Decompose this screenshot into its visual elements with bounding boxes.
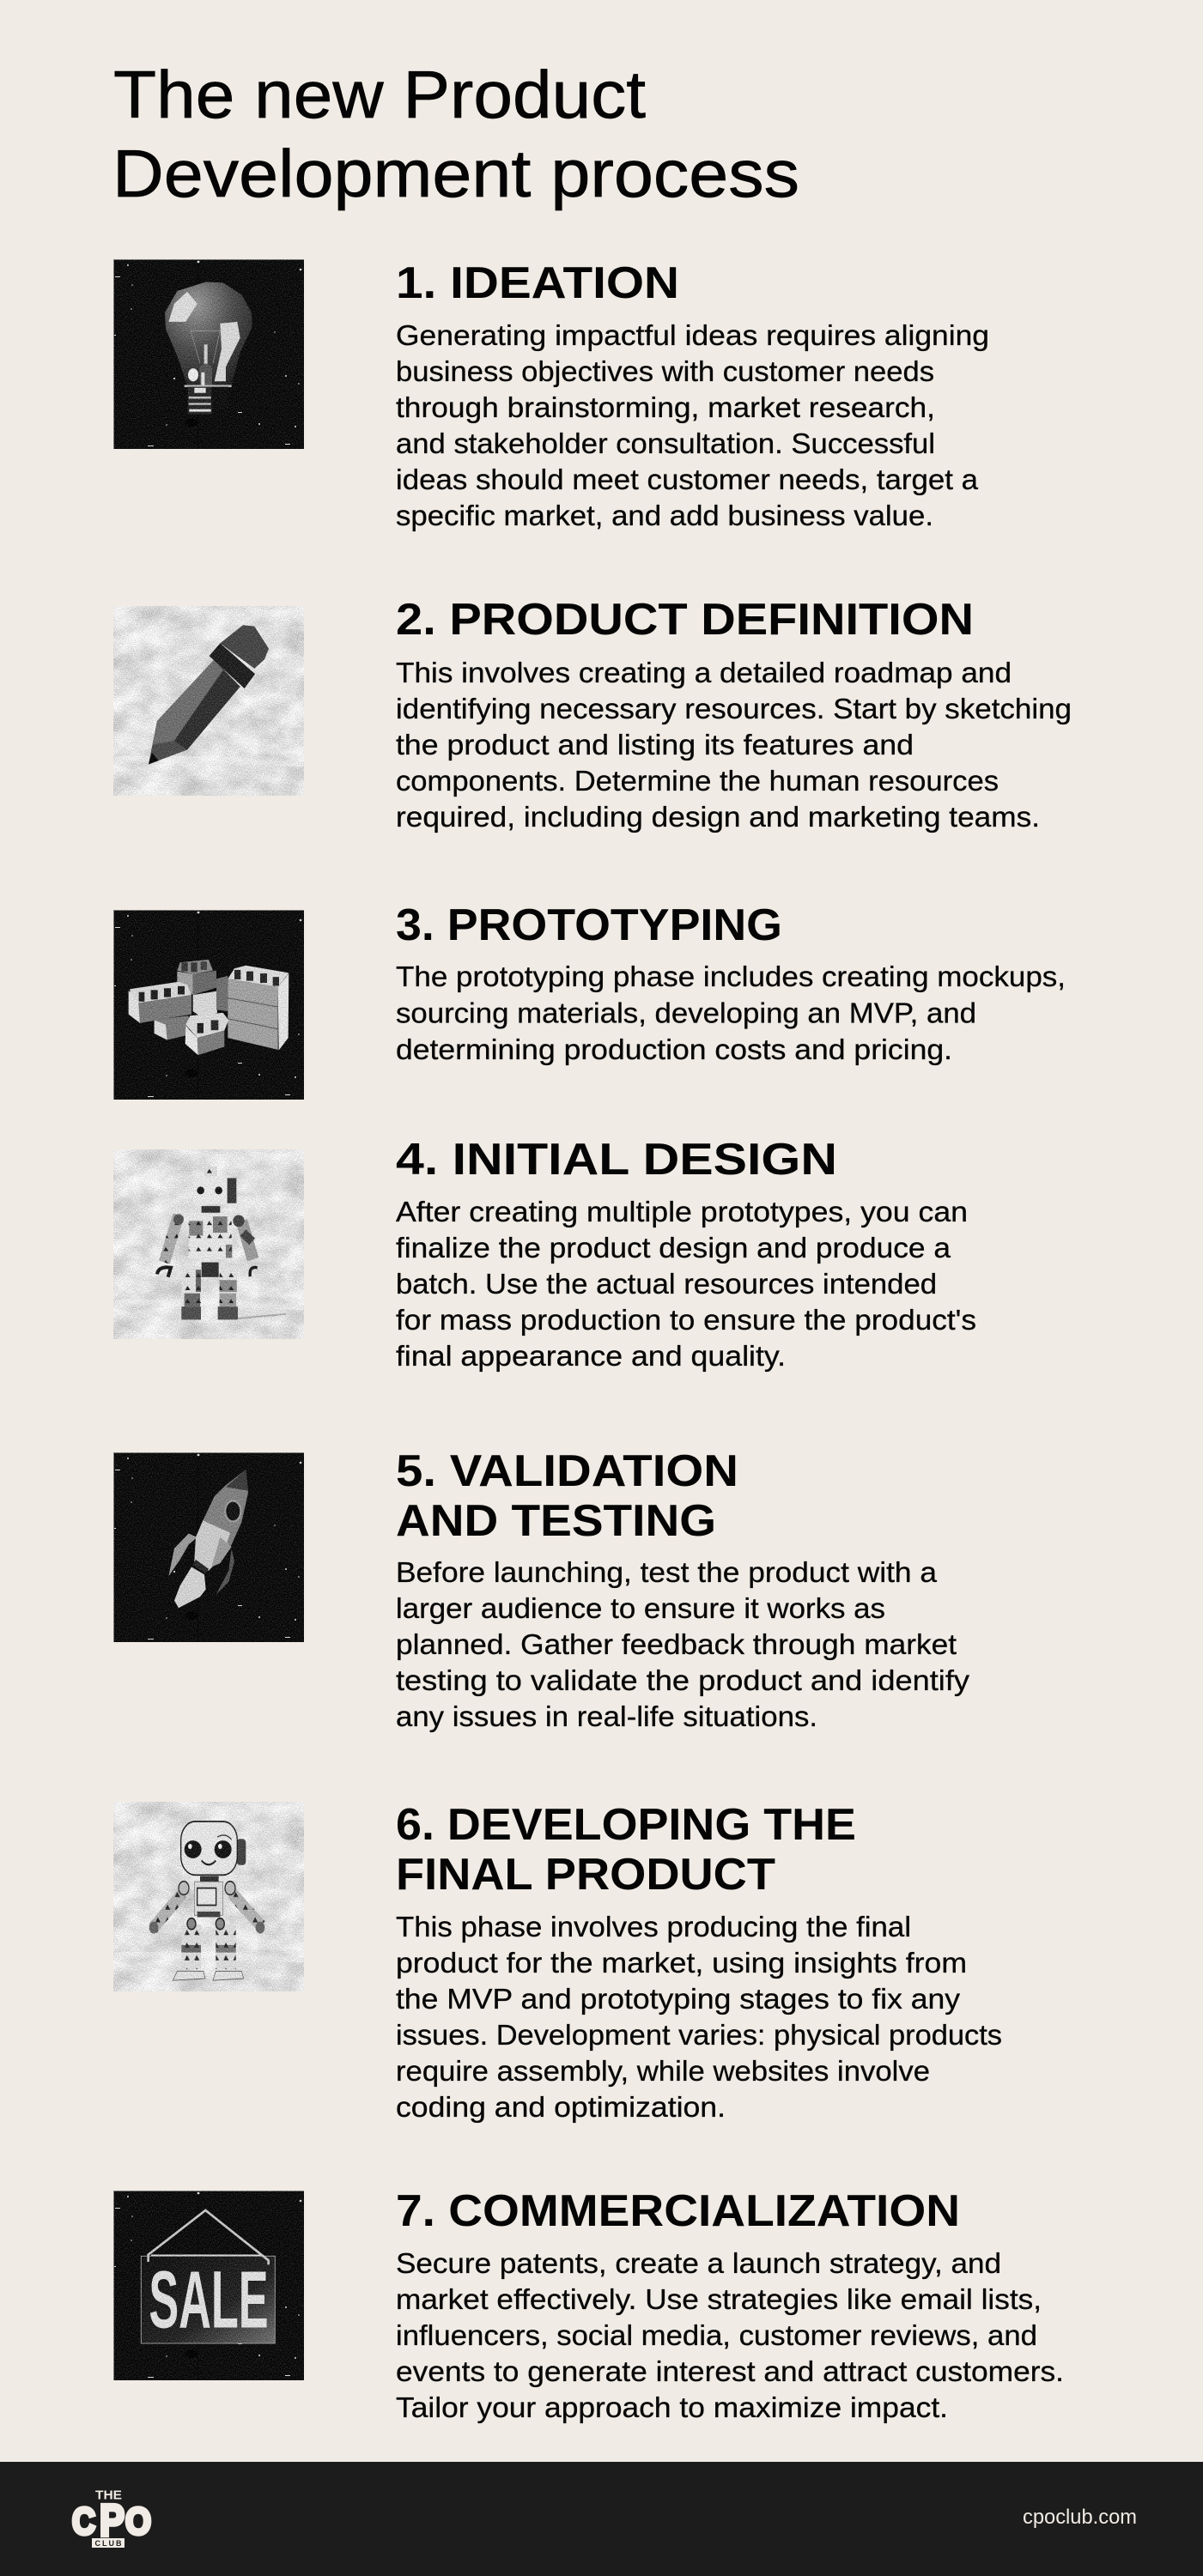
title: [112, 57, 799, 211]
heading: 7. COMMERCIALIZATION: 7. COMMERCIALIZATION: [396, 2186, 960, 2236]
heading: 2. PRODUCT DEFINITION: 2. PRODUCT DEFINITION: [396, 595, 974, 645]
body text: commercialization: [396, 2247, 1064, 2423]
body text: validation and testing: testing to validate the product and identify: [396, 1664, 970, 1696]
heading: 1. IDEATION: 1. IDEATION: [396, 258, 679, 308]
body text: developing the final product: [396, 1911, 1002, 2123]
website url: cpoclub.com: [1023, 2506, 1137, 2529]
title: The new Product: [113, 57, 646, 132]
body text: product definition: components. Determine the human resources: [396, 765, 999, 797]
section 5: validation and testing: [113, 1446, 970, 1732]
body text: validation and testing: larger audience to ensure it works as: [396, 1592, 885, 1624]
section 2: product definition: [113, 595, 1072, 833]
body text: initial design: finalize the product design and produce a: [396, 1232, 951, 1264]
image: light bulb: [113, 259, 304, 449]
body text: product definition: identifying necessary resources. Start by sketching: [396, 693, 1072, 724]
logo: The CPO Club: [72, 2488, 151, 2548]
body text: ideation: [396, 319, 989, 531]
section 7: commercialization: [113, 2186, 1064, 2423]
logo: The CPO Club: P: [100, 2496, 125, 2546]
body text: product definition: the product and listing its features and: [396, 729, 914, 761]
heading: 5. VALIDATION AND TESTING: 5. VALIDATION: [396, 1446, 738, 1496]
section 6: developing the final product: [113, 1800, 1002, 2123]
body text: prototyping: determining production costs and pricing.: [396, 1033, 952, 1065]
body text: developing the final product: coding and optimization.: [396, 2091, 726, 2123]
body text: ideation: ideas should meet customer needs, target a: [396, 464, 979, 495]
body text: initial design: final appearance and quality.: [396, 1340, 786, 1372]
body text: commercialization: Secure patents, create a launch strategy, and: [396, 2247, 1001, 2279]
image: cute robot: [113, 1802, 304, 1991]
body text: prototyping: The prototyping phase includes creating mockups,: [396, 961, 1066, 992]
footer bar: [0, 2462, 1203, 2576]
body text: prototyping: [396, 961, 1066, 1065]
body text: product definition: This involves creating a detailed roadmap and: [396, 657, 1012, 688]
logo: The CPO Club: O: [125, 2500, 151, 2543]
body text: ideation: Generating impactful ideas requires aligning: [396, 319, 989, 351]
body text: product definition: required, including design and marketing teams.: [396, 801, 1040, 833]
body text: prototyping: sourcing materials, developing an MVP, and: [396, 997, 976, 1028]
image: sale sign: SALE: [149, 2255, 269, 2346]
logo: The CPO Club: C: [72, 2500, 95, 2543]
title: Development process: [112, 136, 799, 211]
section 3: prototyping: [113, 900, 1066, 1100]
body text: developing the final product: product for the market, using insights from: [396, 1947, 967, 1979]
heading: 5. VALIDATION AND TESTING: [396, 1446, 738, 1546]
body text: initial design: for mass production to ensure the product's: [396, 1304, 976, 1336]
body text: commercialization: Tailor your approach to maximize impact.: [396, 2391, 948, 2423]
heading: 4. INITIAL DESIGN: 4. INITIAL DESIGN: [396, 1135, 837, 1185]
image: sale sign: [113, 2191, 304, 2380]
body text: validation and testing: Before launching, test the product with a: [396, 1556, 938, 1588]
body text: product definition: [396, 657, 1072, 833]
body text: validation and testing: planned. Gather feedback through market: [396, 1628, 957, 1660]
body text: ideation: through brainstorming, market research,: [396, 391, 935, 423]
body text: ideation: specific market, and add business value.: [396, 500, 933, 531]
body text: validation and testing: [396, 1556, 970, 1732]
heading: 3. PROTOTYPING: 3. PROTOTYPING: [396, 900, 782, 950]
body text: validation and testing: any issues in real-life situations.: [396, 1700, 817, 1732]
section 1: ideation: [113, 258, 989, 531]
logo: The CPO Club: CLUB: [94, 2539, 122, 2548]
body text: initial design: batch. Use the actual resources intended: [396, 1268, 937, 1300]
body text: initial design: After creating multiple prototypes, you can: [396, 1196, 968, 1227]
body text: commercialization: influencers, social media, customer reviews, and: [396, 2319, 1037, 2351]
section 4: initial design: [113, 1135, 976, 1372]
body text: commercialization: events to generate interest and attract customers.: [396, 2355, 1064, 2387]
body text: developing the final product: issues. Development varies: physical products: [396, 2019, 1002, 2051]
heading: 6. DEVELOPING THE FINAL PRODUCT: FINAL PRODUCT: [396, 1850, 775, 1900]
image: toy bricks: [113, 910, 304, 1100]
body text: ideation: business objectives with customer needs: [396, 355, 934, 387]
logo: The CPO Club: THE: [95, 2488, 122, 2503]
body text: ideation: and stakeholder consultation. Successful: [396, 427, 935, 459]
image: brick robot: [113, 1149, 304, 1339]
heading: 6. DEVELOPING THE FINAL PRODUCT: 6. DEVELOPING THE: [396, 1800, 856, 1850]
body text: commercialization: market effectively. Use strategies like email lists,: [396, 2283, 1042, 2315]
image: rocket: [113, 1452, 304, 1642]
image: pencil: [113, 606, 304, 796]
heading: 6. DEVELOPING THE FINAL PRODUCT: [396, 1800, 856, 1900]
body text: developing the final product: require assembly, while websites involve: [396, 2055, 930, 2087]
body text: developing the final product: the MVP and prototyping stages to fix any: [396, 1983, 961, 2015]
body text: initial design: [396, 1196, 976, 1372]
heading: 5. VALIDATION AND TESTING: AND TESTING: [396, 1496, 716, 1546]
body text: developing the final product: This phase involves producing the final: [396, 1911, 911, 1943]
